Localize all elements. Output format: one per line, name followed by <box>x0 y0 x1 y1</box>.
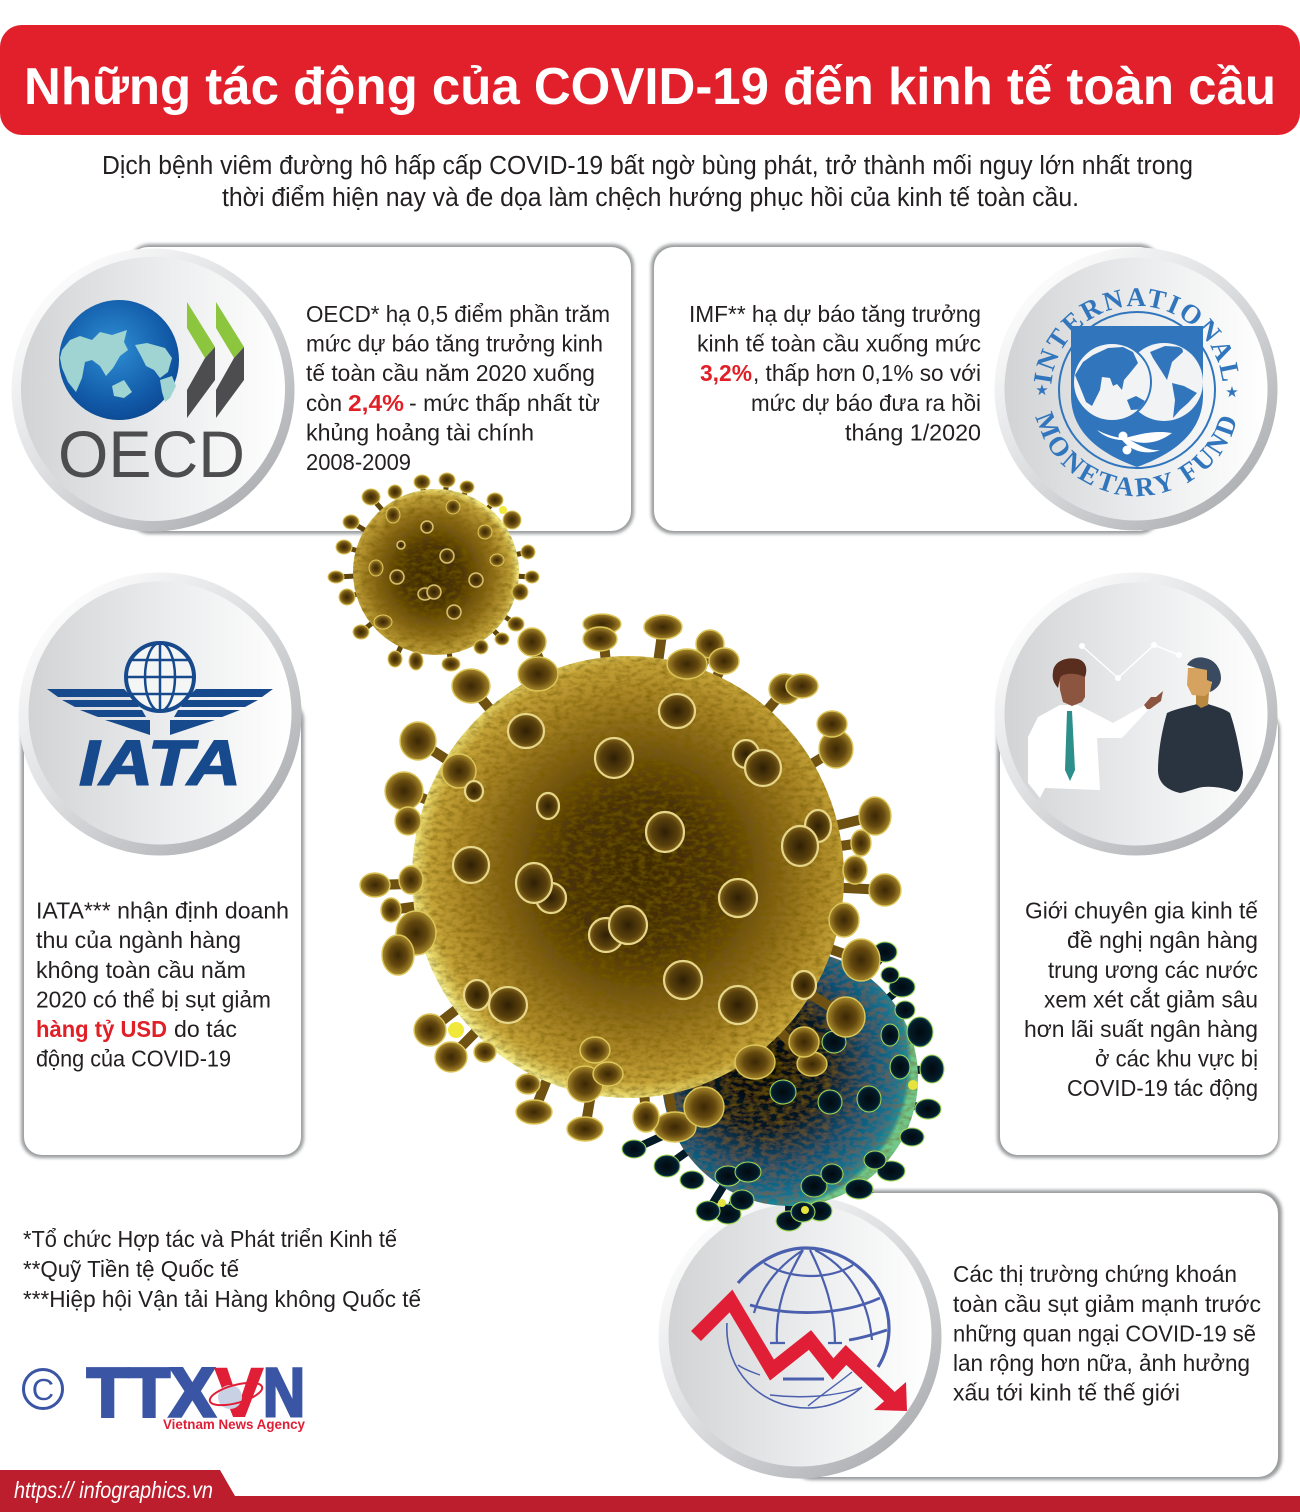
text: IMF <box>689 301 981 446</box>
title banner <box>0 25 1300 135</box>
illustration: small golden coronavirus <box>328 473 539 671</box>
text: stock markets <box>953 1261 1261 1406</box>
icon: IATA logo <box>47 643 273 799</box>
illustration: large golden coronavirus <box>360 614 901 1142</box>
text: OECD <box>306 301 610 475</box>
text: OECD: - mức thấp nhất từ <box>409 390 600 416</box>
icon: copyright symbol: C <box>32 1372 54 1407</box>
footnotes <box>23 1226 421 1312</box>
icon: IATA logo: IATA <box>79 727 241 799</box>
virus spikes <box>360 614 901 1142</box>
text: IMF: 3,2% <box>700 360 752 386</box>
text: economists: xem xét cắt giảm sâu <box>1044 986 1258 1012</box>
text: economists: Giới chuyên gia kinh tế <box>1025 898 1258 924</box>
text: IATA: không toàn cầu năm <box>36 957 246 983</box>
text: OECD: khủng hoảng tài chính <box>306 420 534 446</box>
panel: economists <box>994 572 1280 1158</box>
text: OECD: 2,4% <box>348 390 404 416</box>
logo: TTXVN: N <box>263 1354 305 1431</box>
text: IMF: IMF** hạ dự báo tăng trưởng <box>689 301 981 327</box>
text: economists <box>1024 898 1258 1101</box>
panel: IATA <box>18 572 304 1158</box>
footnotes: ***Hiệp hội Vận tải Hàng không Quốc tế <box>23 1286 421 1312</box>
intro text: Dịch bệnh viêm đường hô hấp cấp COVID-19 bất ngờ bùng phát, trở thành mối nguy lớn nhất trong <box>102 152 1193 180</box>
footer bar with URL <box>0 1470 1300 1512</box>
text: OECD: tế toàn cầu năm 2020 xuống <box>306 360 595 386</box>
text: IATA: thu của ngành hàng <box>36 927 241 953</box>
panel: OECD <box>12 244 634 534</box>
text: IMF: , thấp hơn 0,1% so với <box>753 360 981 386</box>
illustration: teal coronavirus <box>622 942 944 1231</box>
text: IATA <box>36 898 289 1072</box>
text: OECD: mức dự báo tăng trưởng kinh <box>306 330 603 356</box>
text: IATA: 2020 có thể bị sụt giảm <box>36 986 271 1012</box>
icon: IMF seal: MONETARY FUND <box>1035 410 1236 496</box>
text: economists: COVID-19 tác động <box>1067 1075 1258 1101</box>
text: IATA: động của COVID-19 <box>36 1046 231 1072</box>
virus surface rings <box>453 694 831 1024</box>
text: economists: trung ương các nước <box>1048 957 1258 983</box>
text: IATA: IATA*** nhận định doanh <box>36 898 289 924</box>
icon: IMF seal: ★ <box>1225 383 1239 401</box>
text: stock markets: xấu tới kinh tế thế giới <box>953 1380 1180 1406</box>
icon: IMF seal: INTERNATIONAL <box>1034 288 1238 384</box>
intro text: thời điểm hiện nay và đe dọa làm chệch hướng phục hồi của kinh tế toàn cầu. <box>222 184 1079 212</box>
footnotes: **Quỹ Tiền tệ Quốc tế <box>23 1256 239 1282</box>
title banner: Những tác động của COVID-19 đến kinh tế toàn cầu <box>24 58 1276 116</box>
text: IATA: hàng tỷ USD <box>36 1016 167 1042</box>
text: stock markets: toàn cầu sụt giảm mạnh trước <box>953 1291 1261 1317</box>
text: IMF: tháng 1/2020 <box>845 420 981 446</box>
logo: TTXVN: TTX <box>87 1354 215 1431</box>
icon: IMF seal: ★ <box>1035 381 1049 399</box>
text: stock markets: Các thị trường chứng khoán <box>953 1261 1237 1287</box>
footer bar with URL: https:// infographics.vn <box>14 1477 213 1503</box>
icon: IMF seal <box>1034 288 1239 496</box>
icon: copyright symbol <box>24 1370 62 1408</box>
text: OECD: 2008-2009 <box>306 449 411 475</box>
text: stock markets: lan rộng hơn nữa, ảnh hưởng <box>953 1350 1250 1376</box>
icon: OECD logo: OECD <box>58 417 245 491</box>
panel: IMF <box>649 242 1278 536</box>
logo: TTXVN <box>87 1354 305 1432</box>
text: OECD: còn <box>306 390 342 416</box>
logo: TTXVN: V <box>215 1354 263 1431</box>
icon: two experts talking <box>1028 642 1243 798</box>
intro text <box>102 152 1193 212</box>
text: OECD: OECD* hạ 0,5 điểm phần trăm <box>306 301 610 327</box>
icon: OECD logo <box>58 300 245 491</box>
footnotes: *Tổ chức Hợp tác và Phát triển Kinh tế <box>23 1226 397 1252</box>
panel: stock markets <box>658 1190 1282 1480</box>
logo: TTXVN: Vietnam News Agency <box>163 1417 305 1432</box>
text: IATA: do tác <box>174 1016 237 1042</box>
icon: globe with falling arrow <box>696 1248 907 1411</box>
text: economists: ở các khu vực bị <box>1095 1046 1258 1072</box>
text: economists: đề nghị ngân hàng <box>1067 927 1258 953</box>
text: stock markets: những quan ngại COVID-19 sẽ <box>953 1320 1256 1346</box>
text: IMF: mức dự báo đưa ra hồi <box>751 390 981 416</box>
text: economists: hơn lãi suất ngân hàng <box>1024 1016 1258 1042</box>
text: IMF: kinh tế toàn cầu xuống mức <box>697 330 981 356</box>
